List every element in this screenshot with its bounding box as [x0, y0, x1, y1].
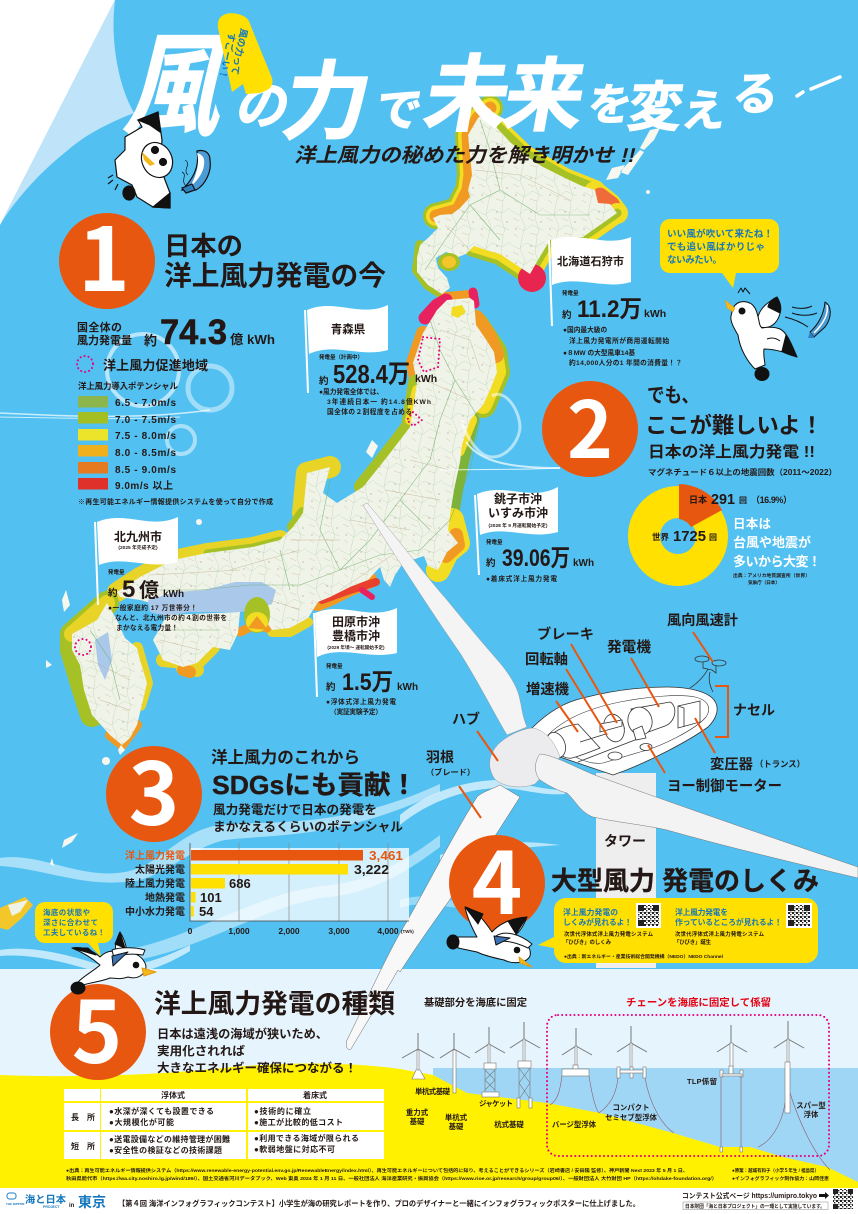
comparison table: 短 所	[71, 1141, 95, 1151]
footer background	[0, 1188, 858, 1214]
source: earthquakes	[733, 572, 810, 586]
turbine parts labels	[426, 612, 805, 849]
foundation type labels: スパー型	[796, 1101, 826, 1110]
heading 2: でも、	[647, 385, 699, 407]
flag: Tahara Toyohashi	[314, 608, 418, 716]
national output: 約	[144, 333, 157, 348]
flag: Choshi Isumi: 39.06万	[502, 545, 570, 572]
flag: Kitakyushu: 5	[122, 576, 135, 603]
heading 1	[164, 231, 386, 291]
turbine parts labels: （ブレード）	[426, 767, 475, 777]
bar chart: 3,222	[354, 862, 389, 877]
donut chart: earthquakes: 291	[711, 492, 735, 508]
promotion area outlines	[75, 337, 440, 655]
flag: Tahara Toyohashi: 1.5万	[342, 669, 393, 696]
blade right	[535, 754, 858, 878]
flag: Choshi Isumi: 銚子市沖	[494, 491, 542, 506]
flag: Kitakyushu: 約	[108, 587, 118, 599]
contest link	[682, 1189, 853, 1210]
Kyushu land	[72, 603, 147, 745]
heading 3: 風力発電だけで日本の発電を	[213, 802, 377, 817]
flag: Ishikari	[549, 237, 682, 367]
turbine parts labels: 回転軸	[525, 651, 568, 667]
number 1 badge: 1	[78, 190, 130, 317]
section 2	[542, 369, 837, 586]
flag: Ishikari: 発電量	[562, 289, 579, 297]
turbine parts labels: ヨー制御モーター	[667, 777, 782, 795]
bar chart: 地熱発電	[145, 891, 185, 904]
flag: Choshi Isumi: kWh	[573, 558, 594, 569]
number 2 badge	[542, 369, 638, 481]
flag: Choshi Isumi: ●着床式洋上風力発電	[486, 574, 557, 583]
flag: Tahara Toyohashi: （実証実験予定）	[330, 707, 382, 716]
footer QR code	[833, 1189, 853, 1209]
turbine tower	[596, 773, 656, 968]
national output: 74.3	[160, 313, 227, 352]
source: earthquakes: 出典：アメリカ地質調査所（世界）	[733, 572, 810, 579]
footer description: 【第４回 海洋インフォグラフィックコンテスト】小学生が海の研究レポートを作り、プロのデザイナーと一緒にインフォグラフィックポスターに仕上げました。	[118, 1198, 640, 1208]
donut chart: earthquakes: 世界	[652, 532, 670, 542]
Seto inland sea	[148, 582, 276, 616]
heading 2: 日本の洋上風力発電 !!	[648, 443, 815, 461]
comparison table: ●安全性の検証などの技術課題	[109, 1145, 222, 1155]
section 5 background	[0, 969, 858, 1188]
flag: Kitakyushu: 発電量	[108, 568, 125, 576]
donut chart: earthquakes: 回	[739, 496, 747, 505]
bar chart: 中小水力発電	[125, 905, 185, 918]
flag: Ishikari: 洋上風力発電所が商用運転開始	[569, 336, 669, 345]
bar chart: 4,000	[377, 926, 399, 936]
flag: Aomori: 青森県	[331, 322, 366, 336]
turbine: piled	[510, 1022, 540, 1108]
yellow QR panel: 「ひびき」誕生	[674, 938, 712, 946]
white note: typhoons and earthquakes: 台風や地震が	[733, 535, 811, 550]
foundation type labels: 単杭式	[445, 1113, 468, 1122]
section 4	[447, 814, 819, 967]
sources: ●原案：越城有和子（小学５年生 / 福島県）	[732, 1167, 819, 1174]
flag: Tahara Toyohashi: 約	[326, 681, 336, 693]
turbine leader lines	[459, 632, 728, 818]
turbine parts labels: タワー	[604, 833, 646, 849]
heading 3: SDGsにも貢献！	[212, 770, 417, 800]
fixed foundation heading: 基礎部分を海底に固定	[424, 996, 527, 1009]
blade upper left	[363, 503, 527, 735]
flag: Tahara Toyohashi: kWh	[397, 682, 418, 693]
title speech bubble: すごーい！	[216, 31, 238, 80]
page curl corner	[0, 0, 134, 225]
foundation type labels: ジャケット	[479, 1099, 513, 1108]
bar chart: 2,000	[278, 926, 300, 936]
comparison table: ●水深が深くても設置できる	[109, 1106, 214, 1116]
title speech bubble	[216, 13, 272, 94]
flag: Ishikari: 北海道石狩市	[557, 254, 624, 268]
title: 変	[624, 78, 687, 138]
flag: Kitakyushu: なんと、北九州市の約４割の世帯を	[115, 613, 227, 622]
bar chart	[125, 843, 414, 936]
legend: 7.5 - 8.0m/s	[115, 431, 176, 442]
speech bubble: seabed: 深さに合わせて	[43, 917, 98, 927]
legend: 8.5 - 9.0m/s	[115, 465, 176, 476]
speech bubble: good wind	[660, 219, 779, 288]
flag: Kitakyushu: 億	[139, 579, 159, 602]
footer logos: 東京	[78, 1194, 106, 1210]
turbine: semi-submersible	[599, 1026, 674, 1133]
footer logos: in	[69, 1203, 75, 1209]
Okinawa	[0, 897, 33, 930]
foundation type labels: TLP係留	[687, 1077, 717, 1086]
seabed yellow	[0, 1063, 858, 1188]
wind streams upper	[0, 334, 232, 454]
donut chart: earthquakes: （16.9%）	[751, 495, 792, 505]
wind wave streams	[0, 780, 565, 975]
bar chart: (TWh)	[401, 929, 414, 934]
sources: 秋田県能代市（https://wa.city.noshiro.lg.jp/wind/189/）、国土交通省河川データブック、Web 東奥 2024 年 1 月 11 日、一般社団法人 海洋産業研究・振興協会（https://www.rioe.or.jp/research/group/group06/）、一般財団法人 大竹財団 HP（https://ohdake-foundation.org/）	[66, 1175, 717, 1182]
white note: typhoons and earthquakes: 日本は	[733, 516, 771, 531]
flag: Tahara Toyohashi: 豊橋市沖	[332, 628, 380, 643]
bar chart: 洋上風力発電	[125, 849, 185, 862]
foundation type labels: セミセブ型浮体	[605, 1113, 657, 1122]
foundation type labels: 基礎	[410, 1117, 425, 1126]
national output: 風力発電量	[77, 333, 132, 347]
foundation type labels: 浮体	[804, 1110, 819, 1119]
number 1 badge	[59, 190, 155, 317]
title: え	[679, 87, 729, 136]
foundation type labels: バージ型浮体	[552, 1120, 597, 1129]
turbine parts labels: ナセル	[733, 702, 775, 718]
title: る	[730, 68, 781, 120]
number 3 badge	[106, 725, 202, 850]
title: 未	[418, 48, 518, 142]
blade lower left	[346, 785, 520, 1049]
flag: Ishikari: 約14,000人分の1 年間の消費量！？	[569, 358, 682, 367]
yellow QR panel: 次世代浮体式洋上風力発電システム	[564, 930, 654, 938]
flag: Ishikari: 約	[562, 309, 572, 321]
heading 3	[211, 748, 417, 834]
turbine parts labels: 変圧器	[710, 756, 753, 772]
hub	[490, 728, 560, 787]
comparison table: 長 所	[71, 1112, 95, 1122]
flag: Kitakyushu: まかなえる電力量！	[116, 623, 178, 632]
flag: Ishikari: ●国内最大級の	[563, 325, 607, 334]
sources	[66, 1167, 829, 1182]
flag: Aomori: 3年連続日本一 約14.8億KWh	[327, 397, 431, 406]
contest link: 日本財団「海と日本プロジェクト」の一環として実施しています。	[685, 1203, 825, 1210]
donut chart: earthquakes	[644, 484, 792, 570]
flag: Kitakyushu: 北九州市	[114, 529, 162, 544]
nacelle cross-section	[532, 687, 717, 775]
footer logos: PROJECT	[43, 1205, 60, 1209]
mascot: flying seagull with headband	[447, 907, 532, 967]
title: 力	[276, 56, 378, 151]
donut chart: earthquakes: 回	[709, 533, 717, 542]
flag: Tahara Toyohashi: 田原市沖	[332, 614, 380, 629]
comparison table: ●送電設備などの維持管理が困難	[109, 1134, 230, 1144]
heading 5: 大きなエネルギー確保につながる！	[157, 1060, 357, 1075]
flag: Choshi Isumi: 約	[486, 557, 496, 569]
yellow QR panel: 洋上風力発電を	[675, 907, 728, 917]
bar chart: 54	[199, 904, 214, 919]
speech bubble: seabed: 海底の状態や	[43, 907, 90, 917]
mascot: seagull facing wind	[725, 288, 830, 380]
flag: Tahara Toyohashi: (2029 年頃～ 運転開始予定)	[327, 644, 385, 651]
foundation type labels: 杭式基礎	[494, 1120, 524, 1129]
comparison table: ●施工が比較的低コスト	[254, 1117, 343, 1127]
bar chart: 太陽光発電	[135, 863, 185, 876]
Shikoku land	[153, 612, 240, 667]
bar chart: 686	[229, 876, 251, 891]
number 4 badge: 4	[472, 814, 522, 939]
dotted floating zone	[547, 1015, 829, 1156]
foundation type labels: 基礎	[449, 1122, 464, 1131]
Funka bay plume	[438, 253, 460, 271]
QR code 1	[636, 903, 661, 928]
white note: typhoons and earthquakes: 多いから大変！	[733, 554, 821, 569]
speech bubble: good wind: でも追い風ばかりじゃ	[667, 241, 765, 253]
legend: 8.0 - 8.5m/s	[115, 448, 176, 459]
legend: 洋上風力導入ポテンシャル	[78, 381, 178, 391]
turbine parts labels: 風向風速計	[667, 612, 738, 628]
bar chart: 0	[188, 926, 193, 936]
comparison table: ●軟弱地盤に対応不可	[254, 1144, 335, 1154]
QR code 2	[786, 903, 812, 928]
number 4 badge	[449, 814, 545, 939]
number 5 badge: 5	[72, 963, 122, 1088]
section 3	[106, 725, 417, 936]
yellow QR panel: 作っているところが見れるよ！	[675, 917, 782, 927]
yellow QR panel: 次世代浮体式洋上風力発電システム	[675, 930, 765, 938]
title: で	[371, 84, 426, 136]
title speech bubble: 風の力って	[228, 27, 250, 76]
bar chart: 陸上風力発電	[125, 877, 185, 890]
footer logos	[6, 1193, 106, 1210]
bar chart: 3,461	[369, 848, 403, 863]
foundation type labels: 重力式	[406, 1108, 429, 1117]
wind potential bands	[72, 108, 617, 745]
speech bubble: seabed	[35, 902, 113, 957]
white note: typhoons and earthquakes	[733, 516, 821, 569]
turbine: jacket	[475, 1027, 505, 1097]
title: を	[585, 81, 635, 130]
yellow QR panel: しくみが見れるよ！	[563, 917, 632, 927]
footer logos: THE NIPPON	[6, 1202, 24, 1206]
legend: ※再生可能エネルギー情報提供システムを使って自分で作成	[78, 497, 273, 506]
comparison table: ●技術的に確立	[254, 1106, 311, 1116]
heading 5: 実用化されれば	[157, 1043, 245, 1058]
flag: Tahara Toyohashi: 発電量	[326, 662, 343, 670]
road network	[90, 120, 590, 710]
turbine parts labels: 発電機	[607, 638, 652, 656]
legend: 7.0 - 7.5m/s	[115, 415, 176, 426]
number 2 badge: 2	[567, 369, 613, 481]
heading 5: 日本は遠浅の海域が狭いため、	[157, 1026, 328, 1041]
sources: ●出典：再生可能エネルギー情報提供システム（https://www.renewable-energy-potential.env.go.jp/RenewableEnergy/index.html）、再生可能エネルギーについて包括的に知り、考えることができるシリーズ（岩崎書店 / 安田陽 監修）、神戸新聞 Next 2023 年 5 月 1 日、	[66, 1167, 688, 1174]
flag: Kitakyushu: (2025 年完成予定)	[118, 544, 158, 551]
comparison table	[64, 1089, 384, 1159]
turbine parts labels: 羽根	[426, 749, 454, 765]
flag: Kitakyushu: ●一般家庭約 17 万世帯分！	[108, 603, 197, 612]
flag: Aomori: ●風力発電全体では、	[319, 387, 383, 396]
speech bubble: good wind: ないみたい。	[667, 255, 722, 266]
number 5 badge	[50, 963, 146, 1088]
title: 風	[116, 25, 244, 150]
wind stream near section 2	[440, 394, 560, 470]
legend: 洋上風力促進地域	[103, 358, 208, 373]
mascot: seagull with headband	[71, 932, 156, 994]
source: earthquakes: 気象庁（日本）	[748, 579, 780, 586]
footer logos: 海と日本	[25, 1193, 66, 1206]
speech bubble: good wind: いい風が吹いて来たね！	[667, 228, 773, 240]
flag: Aomori	[305, 305, 437, 416]
turbine: monopile	[440, 1033, 470, 1093]
turbine: spar	[758, 1021, 830, 1170]
contest link: コンテスト公式ページ https://umipro.tokyo	[682, 1191, 817, 1200]
flag: Ishikari: ●８MW の大型風車14基	[563, 348, 635, 357]
subtitle: 洋上風力の秘めた力を解き明かせ !!	[293, 144, 638, 167]
donut chart: earthquakes: 日本	[689, 494, 707, 505]
comparison table: ●大規模化が可能	[109, 1117, 174, 1127]
turbine parts labels: （トランス）	[755, 759, 805, 769]
national output: 国全体の	[77, 320, 122, 334]
flag: Aomori: 約	[319, 375, 329, 387]
bar chart: 1,000	[228, 926, 250, 936]
yellow QR panel: 洋上風力発電の	[563, 907, 618, 917]
comparison table: 浮体式	[161, 1090, 185, 1100]
flag: Ishikari: kWh	[644, 308, 666, 320]
national output: 億 kWh	[230, 332, 275, 347]
national output	[77, 313, 275, 352]
flag: Choshi Isumi: 発電量	[486, 538, 503, 546]
section 1	[59, 190, 386, 506]
turbine parts labels: 増速機	[526, 681, 569, 697]
legend: 9.0m/s 以上	[115, 479, 173, 492]
yellow QR panel: ●出典：新エネルギー・産業技術総合開発機構（NEDO）NEDO Channel	[564, 953, 723, 960]
foundation type labels: コンパクト	[613, 1103, 649, 1112]
Mutsu bay	[451, 305, 466, 318]
turbine parts labels: ブレーキ	[537, 626, 594, 642]
heading 5	[154, 989, 395, 1075]
heading 3: まかなえるくらいのポテンシャル	[213, 820, 403, 834]
heading 1: 洋上風力発電の今	[164, 260, 386, 291]
turbine parts labels: ハブ	[452, 711, 480, 727]
heading 2: マグネチュード６以上の地震回数（2011～2022）	[648, 467, 837, 477]
bar chart: 101	[200, 890, 222, 905]
title: の	[230, 78, 297, 136]
flag: Aomori: kWh	[415, 373, 437, 385]
speech bubble: seabed: 工夫しているね！	[43, 927, 105, 937]
flag: Choshi Isumi: いすみ市沖	[488, 505, 548, 520]
section 5	[50, 963, 830, 1182]
floating heading: チェーンを海底に固定して係留	[626, 996, 771, 1009]
legend	[77, 356, 273, 506]
title	[116, 25, 840, 151]
flag: Aomori: 発電量（計画中）	[319, 353, 363, 361]
flag: Kitakyushu	[95, 517, 227, 632]
sea	[433, 1068, 858, 1188]
Hokkaido land	[417, 108, 617, 294]
number 3 badge: 3	[129, 725, 179, 850]
turbine: TLP	[717, 1025, 747, 1152]
heading 2: ここが難しいよ！	[645, 413, 823, 438]
map of Japan	[0, 108, 660, 930]
flag: Tahara Toyohashi: ●浮体式洋上風力発電	[326, 697, 396, 706]
heading 3: 洋上風力のこれから	[211, 748, 360, 767]
comparison table: 着床式	[303, 1090, 327, 1100]
Cape Erimo red zone	[518, 264, 546, 292]
title: 来	[497, 53, 593, 142]
foundation type labels	[406, 1077, 826, 1131]
flag: Ishikari: 11.2万	[577, 296, 642, 323]
bar chart: 3,000	[328, 926, 350, 936]
flag: Choshi Isumi: (2028 年 9 月運転開始予定)	[489, 522, 548, 529]
flag: Aomori: 国全体の２割程度を占める	[327, 407, 412, 416]
foundation type labels: 単杭式基礎	[415, 1087, 451, 1096]
anemometer	[690, 656, 726, 692]
turbine: gravity foundation	[402, 1033, 434, 1079]
sources: ●インフォグラフィック制作協力：山岡佳恵	[732, 1175, 829, 1182]
donut chart: earthquakes: 1725	[673, 529, 706, 545]
Honshu land	[117, 298, 497, 630]
turbine: barge	[550, 1028, 599, 1113]
flag: Choshi Isumi	[475, 487, 594, 583]
heading 4: 大型風力 発電のしくみ	[551, 866, 819, 896]
yellow QR panel	[538, 898, 818, 963]
small northern and southern islands	[46, 128, 660, 866]
Kii channel plume	[244, 597, 270, 633]
heading 2	[645, 385, 837, 477]
flag: Aomori: 528.4万	[333, 359, 410, 389]
heading 5: 洋上風力発電の種類	[154, 989, 395, 1019]
flag: Kitakyushu: kWh	[163, 589, 184, 600]
heading 1: 日本の	[164, 231, 243, 261]
Kyushu inner sea	[95, 632, 112, 680]
yellow QR panel: 「ひびき」のしくみ	[563, 938, 612, 946]
mascot: upside-down seagull	[108, 112, 210, 208]
comparison table: ●利用できる海域が限られる	[254, 1133, 359, 1143]
legend: 6.5 - 7.0m/s	[115, 398, 176, 409]
